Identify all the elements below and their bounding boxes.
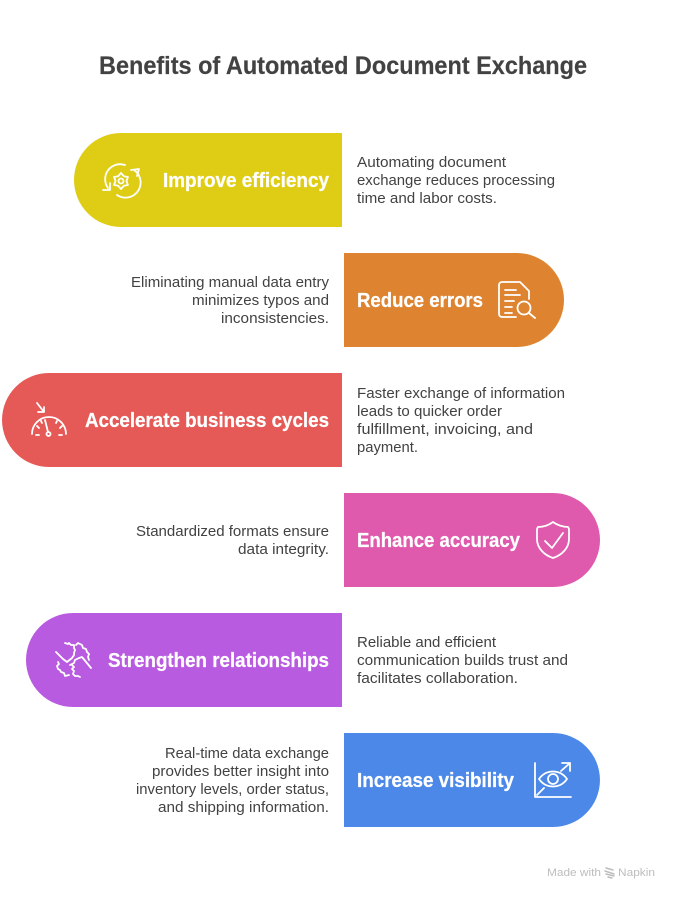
- footer: made with napkin: Made with: [547, 867, 601, 879]
- text: increase visibility description: Real-time data exchange: [165, 746, 329, 762]
- pill: enhance accuracy: [344, 493, 600, 587]
- pill: accelerate business cycles: [2, 373, 342, 467]
- text: increase visibility description: inventory levels, order status,: [136, 782, 329, 798]
- text: reduce errors description: minimizes typos and: [192, 293, 329, 309]
- panel: enhance accuracy: [344, 493, 600, 587]
- text: increase visibility description: provides better insight into: [152, 764, 329, 780]
- icon: shield with check: [537, 522, 569, 558]
- text: strengthen relationships description: facilitates collaboration.: [357, 671, 518, 687]
- text: enhance accuracy description: [136, 524, 329, 558]
- pill: strengthen relationships: [26, 613, 342, 707]
- text: reduce errors description: Eliminating manual data entry: [131, 275, 330, 291]
- icon: napkin logo: [605, 868, 614, 878]
- pill: improve efficiency: [74, 133, 342, 227]
- pill: reduce errors: [344, 253, 564, 347]
- icon: document with magnifier: [499, 282, 535, 318]
- text: accelerate business cycles description: fulfillment, invoicing, and: [357, 422, 533, 438]
- text: reduce errors description: [131, 275, 330, 327]
- pill: increase visibility: [344, 733, 600, 827]
- text: accelerate business cycles description: leads to quicker order: [357, 404, 502, 420]
- label: strengthen relationships: Strengthen relationships: [108, 650, 329, 672]
- panel: strengthen relationships: [26, 613, 342, 707]
- text: reduce errors description: inconsistencies.: [221, 311, 329, 327]
- panel: increase visibility: [344, 733, 600, 827]
- title: Benefits of Automated Document Exchange: [99, 52, 587, 80]
- label: improve efficiency: Improve efficiency: [163, 170, 330, 192]
- text: improve efficiency description: time and labor costs.: [357, 191, 497, 207]
- text: accelerate business cycles description: Faster exchange of information: [357, 386, 565, 402]
- icon: gear with cycle arrows: [103, 164, 141, 198]
- text: increase visibility description: and shipping information.: [158, 800, 329, 816]
- text: improve efficiency description: Automating document: [357, 155, 506, 171]
- text: strengthen relationships description: [357, 635, 568, 687]
- panel: accelerate business cycles: [2, 373, 342, 467]
- icon: eye on chart with arrow: [535, 763, 571, 797]
- text: enhance accuracy description: data integrity.: [238, 542, 329, 558]
- text: accelerate business cycles description: payment.: [357, 440, 418, 456]
- footer: made with napkin: [547, 867, 655, 879]
- panel: reduce errors: [344, 253, 564, 347]
- text: increase visibility description: [136, 746, 329, 816]
- icon: interlocking hands: [56, 643, 91, 677]
- label: accelerate business cycles: Accelerate business cycles: [85, 410, 329, 432]
- label: enhance accuracy: Enhance accuracy: [357, 530, 521, 552]
- label: reduce errors: Reduce errors: [357, 290, 483, 312]
- footer: made with napkin: Napkin: [618, 867, 655, 879]
- icon: speedometer with arrow: [32, 403, 66, 436]
- panel: improve efficiency: [74, 133, 342, 227]
- text: strengthen relationships description: Reliable and efficient: [357, 635, 496, 651]
- text: strengthen relationships description: communication builds trust and: [357, 653, 568, 669]
- text: enhance accuracy description: Standardized formats ensure: [136, 524, 329, 540]
- text: accelerate business cycles description: [357, 386, 565, 456]
- label: increase visibility: Increase visibility: [357, 770, 515, 792]
- text: improve efficiency description: exchange reduces processing: [357, 173, 555, 189]
- text: improve efficiency description: [357, 155, 555, 207]
